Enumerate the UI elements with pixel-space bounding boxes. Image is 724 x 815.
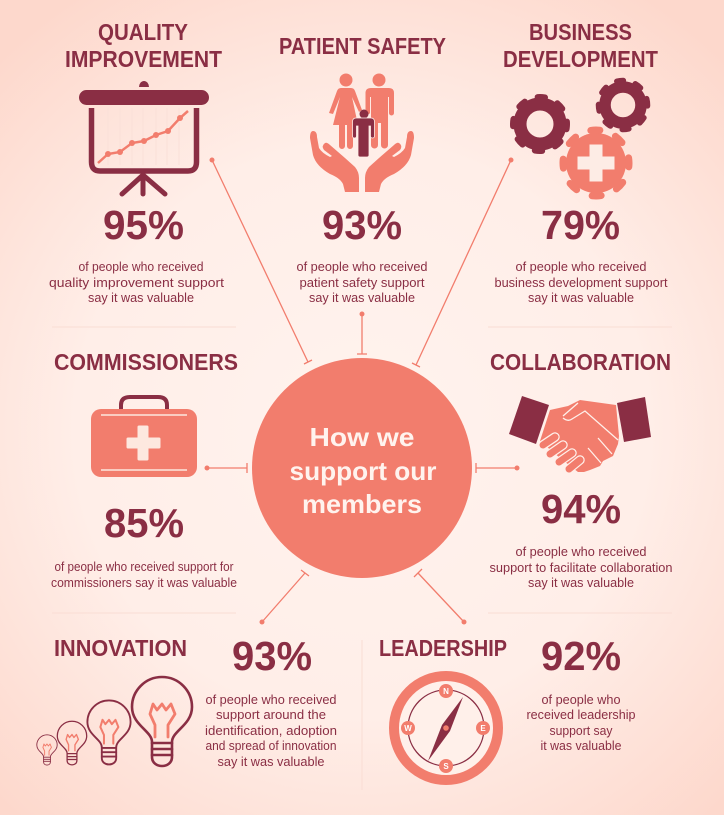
text: collaboration description: support to facilitate collaboration xyxy=(490,561,673,575)
text: leadership description: support say xyxy=(550,724,613,738)
text: patient safety description: say it was valuable xyxy=(309,291,415,305)
text: collaboration description xyxy=(490,545,673,590)
text: business development description: business development support xyxy=(494,276,668,290)
heading: collaboration: COLLABORATION xyxy=(490,349,671,375)
heading: quality improvement: QUALITY xyxy=(98,19,188,45)
icon: family in caring hands xyxy=(310,74,414,192)
icon: presentation board with line chart xyxy=(79,81,209,194)
central circle: how we support our members: support our xyxy=(290,456,436,486)
panel: commissioners xyxy=(51,349,238,590)
text: innovation description: support around the xyxy=(216,708,326,722)
connector: business development xyxy=(412,158,514,367)
stat: 79%: 79% xyxy=(541,202,620,248)
text: patient safety description: of people who received xyxy=(296,260,428,274)
central circle: how we support our members: How we xyxy=(310,422,414,452)
text: innovation description: of people who received xyxy=(206,693,337,707)
icon: compass xyxy=(394,676,498,780)
text: quality improvement description xyxy=(49,260,225,305)
text: quality improvement description: quality improvement support xyxy=(49,276,225,290)
text: quality improvement description: say it was valuable xyxy=(88,291,194,305)
text: leadership description: it was valuable xyxy=(540,739,622,753)
text: patient safety description: patient safety support xyxy=(300,276,425,290)
stat: 92%: 92% xyxy=(541,633,621,679)
connector: innovation xyxy=(260,570,309,624)
heading: patient safety: PATIENT SAFETY xyxy=(279,33,446,59)
heading: commissioners: COMMISSIONERS xyxy=(54,349,238,375)
text: innovation description xyxy=(205,693,337,769)
stat: 85%: 85% xyxy=(104,500,184,546)
heading: business development: BUSINESS xyxy=(529,19,632,45)
central circle: how we support our members: members xyxy=(302,489,422,519)
text: commissioners description: commissioners say it was valuable xyxy=(51,576,237,590)
heading: quality improvement xyxy=(65,19,222,72)
heading: leadership: LEADERSHIP xyxy=(379,635,507,661)
text: collaboration description: say it was valuable xyxy=(528,576,634,590)
heading: business development: DEVELOPMENT xyxy=(503,46,658,72)
heading: innovation: INNOVATION xyxy=(54,635,187,661)
connector: quality improvement xyxy=(210,158,312,364)
text: business development description: of people who received xyxy=(516,260,647,274)
text: leadership description: of people who xyxy=(542,693,621,707)
connector: patient safety xyxy=(357,312,367,354)
panel: patient safety xyxy=(279,33,446,305)
text: leadership description: received leadership xyxy=(526,708,636,722)
text: commissioners description xyxy=(51,560,237,590)
stat: 93%: 93% xyxy=(322,202,402,248)
icon: compass: E xyxy=(480,724,486,733)
panel: leadership xyxy=(379,633,636,780)
icon: first aid kit xyxy=(91,397,197,477)
icon: compass: N xyxy=(443,687,449,696)
text: business development description xyxy=(494,260,668,305)
text: quality improvement description: of people who received xyxy=(78,260,204,274)
text: collaboration description: of people who received xyxy=(516,545,647,559)
icon: compass: S xyxy=(443,762,449,771)
panel: quality improvement xyxy=(49,19,225,305)
text: leadership description xyxy=(526,693,636,753)
text: innovation description: and spread of innovation xyxy=(206,739,337,753)
icon: gears with medical cross xyxy=(513,80,648,196)
icon: handshake xyxy=(509,396,651,472)
central circle: how we support our members xyxy=(252,358,472,578)
connector: leadership xyxy=(414,569,466,624)
stat: 95%: 95% xyxy=(103,202,184,248)
stat: 93%: 93% xyxy=(232,633,312,679)
icon: row of light bulbs xyxy=(37,677,192,766)
stat: 94%: 94% xyxy=(541,486,621,532)
heading: quality improvement: IMPROVEMENT xyxy=(65,46,222,72)
icon: compass: W xyxy=(404,724,412,733)
panel: business development xyxy=(494,19,668,305)
heading: business development xyxy=(503,19,658,72)
text: commissioners description: of people who received support for xyxy=(54,560,234,574)
text: innovation description: identification, adoption xyxy=(205,724,337,738)
text: patient safety description xyxy=(296,260,428,305)
connector: commissioners xyxy=(204,463,247,473)
connector: collaboration xyxy=(476,463,520,473)
text: business development description: say it was valuable xyxy=(528,291,634,305)
panel: innovation xyxy=(37,633,337,769)
panel: collaboration xyxy=(490,349,673,590)
text: innovation description: say it was valuable xyxy=(218,755,325,769)
